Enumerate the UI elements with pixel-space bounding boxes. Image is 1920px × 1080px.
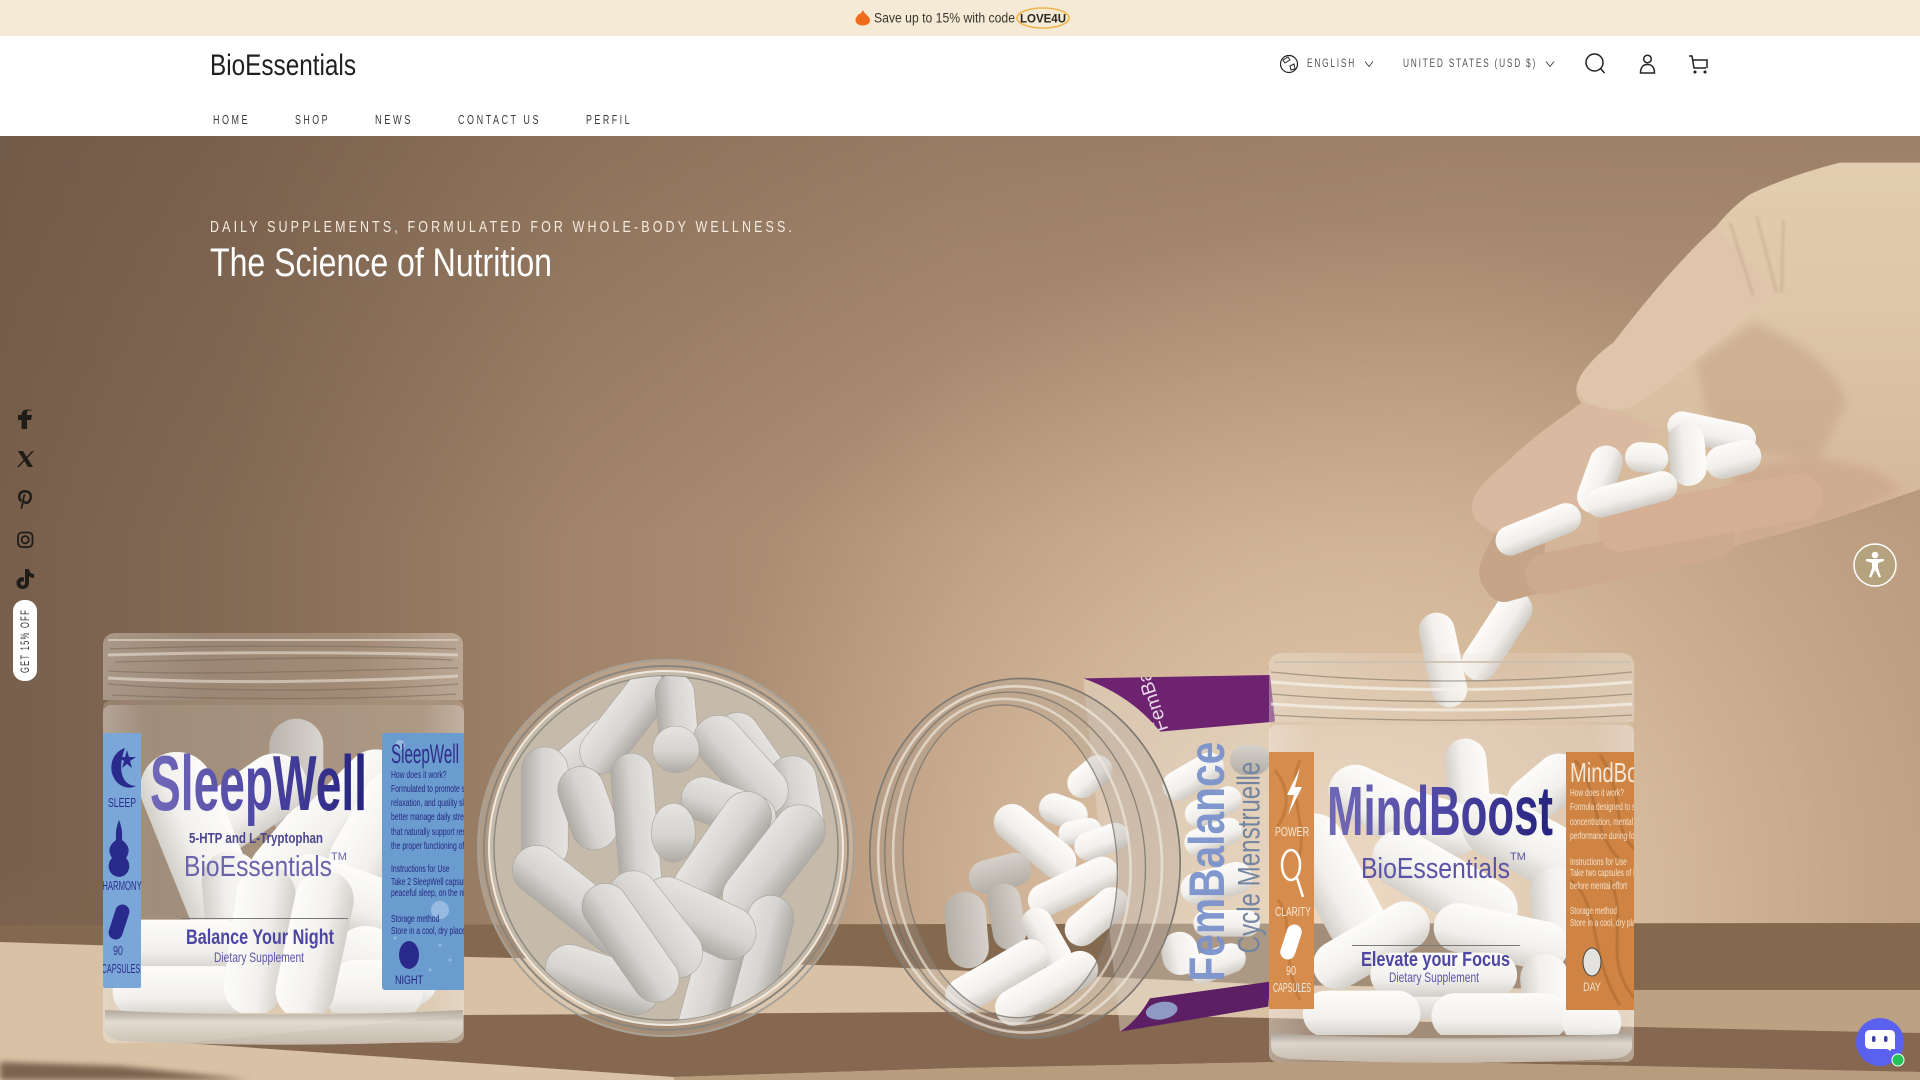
front label text: SleepWell [150,739,367,827]
navigation menu: HOME [213,113,250,127]
right label: before mental effort [1570,880,1628,891]
navigation menu: CONTACT US [458,113,541,127]
right label: Storage method [391,913,440,924]
right label: better manage daily stress for [391,811,481,822]
purple label bottom [1120,982,1270,1032]
navigation menu: PERFIL [586,113,632,127]
hero heading: The Science of Nutrition [210,241,552,285]
announcement bar [0,0,1920,36]
palm shading [1697,323,1903,549]
front label text: 5-HTP and L-Tryptophan [189,830,323,847]
thumb [1594,470,1826,555]
capsules inside SleepWell jar [112,718,436,1013]
front label text: TM [331,851,347,863]
left label: 90 [1286,965,1296,978]
index finger [1577,226,1780,410]
hand holding capsules [1472,163,1920,602]
front label text: BioEssentials [1361,853,1510,885]
front label text: Balance Your Night [186,926,334,949]
bottom-left shadow [0,1062,250,1080]
left label [1269,752,1314,1009]
right label: Formulated to promote sound [391,783,480,794]
right label: Store in a cool, dry place, away [1570,917,1662,928]
glass rim [477,659,855,1037]
left label [102,733,142,988]
header [0,36,1920,136]
capsules inside MindBoost jar [1302,738,1622,1035]
icon: flame [856,10,870,26]
glass highlight [1269,725,1634,1062]
right label: Take 2 SleepWell capsules for [391,876,482,887]
right label: the proper functioning of body [391,840,482,851]
right label: peaceful sleep, on the night [391,887,475,898]
right label: How does it work? [1570,787,1624,798]
left label: SLEEP [108,797,136,810]
jar base [1271,1033,1632,1063]
right label: SleepWell [391,739,459,769]
right label: NIGHT [395,974,423,987]
right label: that naturally support restful [391,826,475,837]
product name: FemBalance [1179,742,1235,982]
logo: BioEssentials [210,49,356,82]
small label name: FemBalance [1120,625,1173,734]
jar body [1083,675,1270,1032]
front label text: MindBoost [1327,772,1553,850]
front label text [150,739,367,965]
icon: cart [1689,56,1707,73]
jar: MindBoost [1269,653,1665,1063]
table surface and shadows [0,923,1920,1080]
right label: relaxation, and quality sleep [391,797,475,808]
jar neck [1269,653,1634,730]
icon: instagram [18,532,32,547]
navigation menu: SHOP [295,113,330,127]
icon: facebook [18,410,32,429]
jar glass body [103,700,464,1043]
jar base [105,1010,463,1045]
grey capsules [512,676,826,1020]
neck collar line [104,707,463,709]
front label text: Dietary Supplement [214,949,304,965]
left label: CAPSULES [1273,982,1311,996]
front label text: Dietary Supplement [1389,969,1479,985]
icon: X [17,451,34,467]
back shadow band [0,923,1920,990]
left label: CLARITY [1275,905,1311,920]
front label text [1327,772,1553,985]
falling capsules [1415,584,1539,711]
middle finger [1472,403,1660,533]
status dot [1892,1054,1904,1066]
right label: Storage method [1570,905,1617,916]
product subtitle: Cycle Menstruelle [1230,762,1266,953]
purple label top [1083,675,1275,732]
shadow under jars [184,1012,1920,1077]
front label text: Elevate your Focus [1361,949,1510,971]
right label: DAY [1583,981,1601,994]
icon: search [1586,54,1604,73]
right label: Instructions for Use [391,863,450,874]
right label: performance during focus [1570,830,1645,841]
lower floor patch [674,1062,1920,1080]
icon: tiktok [16,569,34,589]
discount tab [13,600,37,681]
hero subheading: DAILY SUPPLEMENTS, FORMULATED FOR WHOLE-BODY WELLNESS. [210,219,795,236]
left label: POWER [1275,826,1309,839]
promo text: Save up to 15% with code [874,10,1015,26]
jar: open top view with grey capsules [477,659,855,1063]
leaf mark [1144,999,1179,1022]
floor [0,942,1376,1080]
chat button [1856,1018,1904,1066]
glove folds [1730,216,1783,296]
front label text: BioEssentials [184,851,332,883]
held capsules [1491,409,1765,560]
jar: FemBalance lying on side [855,625,1275,1051]
floor right of jar [1634,990,1920,1080]
promo code [1017,8,1069,28]
jar rim [855,666,1195,1051]
right label: Instructions for Use [1570,856,1627,867]
navigation menu [213,113,632,127]
right label: Store in a cool, dry place, away [391,925,486,936]
language selector [1280,56,1373,72]
navigation menu: NEWS [375,113,413,127]
left label: 90 [113,945,123,958]
promo code: LOVE4U [1020,12,1066,26]
glove [1472,163,1920,602]
ring finger [1521,514,1739,598]
social icons [16,410,34,589]
language selector: ENGLISH [1307,56,1356,70]
front label text: TM [1510,851,1526,863]
jar glass body [1269,722,1634,1062]
currency selector: UNITED STATES (USD $) [1403,56,1537,70]
left label: CAPSULES [102,963,140,977]
capsules inside FemBalance jar [938,745,1270,1033]
icon: account [1640,55,1654,73]
right label: Take two capsules of MindBoost [1570,867,1665,878]
right label: MindBoost [1570,758,1665,789]
right label [1566,752,1634,1010]
jar neck [103,633,463,708]
right label: How does it work? [391,769,447,780]
glass highlight [103,705,464,1043]
jar: SleepWell [102,633,486,1045]
icon: pinterest [18,490,32,509]
left label: HARMONY [102,880,142,894]
right label: Formula designed to support [1570,801,1654,812]
accessibility button [1851,541,1899,589]
right label [382,733,464,990]
little finger [1479,533,1547,602]
right label: concentration, mental clarity [1570,816,1653,827]
discount tab: GET 15% OFF [20,609,32,673]
